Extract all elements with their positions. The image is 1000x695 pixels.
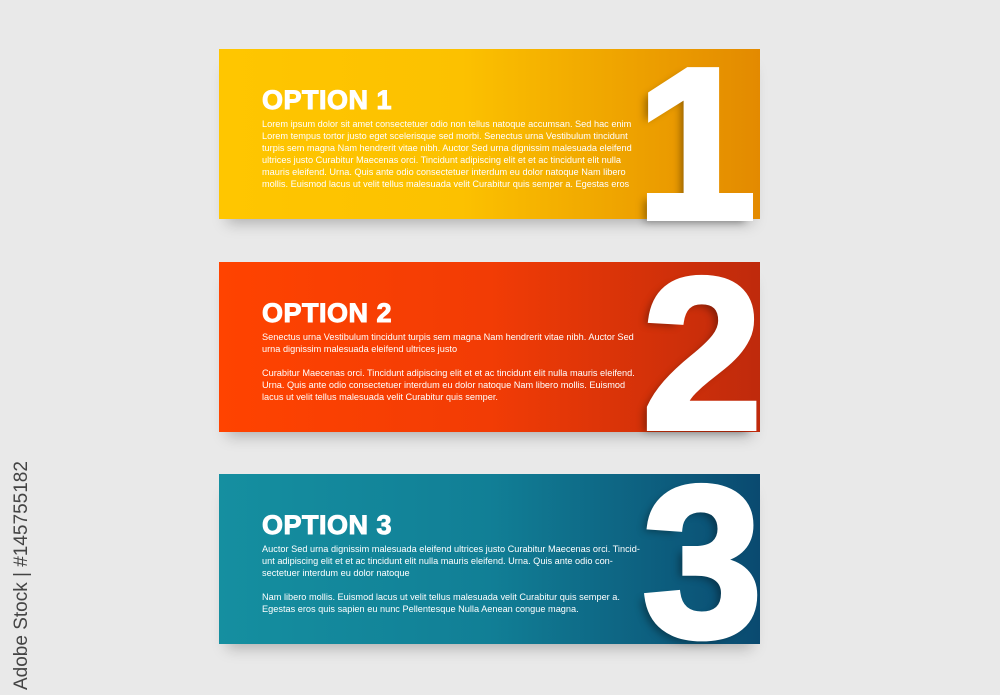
number 2: 2 bbox=[642, 233, 762, 474]
watermark id: Adobe Stock | #145755182 bbox=[11, 461, 32, 690]
number 1: 1 bbox=[636, 23, 756, 264]
number 3: 3 bbox=[642, 441, 762, 682]
text: option 3 body: Nam libero mollis. Euismod lacus ut velit tellus malesuada velit Curabitur quis semper a. Egestas eros quis sapien eu nunc Pellentesque Nulla Aenean congue magna. bbox=[262, 592, 620, 614]
text: option 2 body: Curabitur Maecenas orci. Tincidunt adipiscing elit et et ac tincidunt elit nulla mauris eleifend. Urna. Quis ante odio consectetuer interdum eu dolor natoque Nam libero mollis. Euismod lacus ut velit tellus malesuada velit Curabitur quis semper. bbox=[262, 368, 635, 402]
text: option 2 body: Senectus urna Vestibulum tincidunt turpis sem magna Nam hendrerit vitae nibh. Auctor Sed urna dignissim malesuada eleifend ultrices justo bbox=[262, 332, 634, 354]
text: option 3 body bbox=[262, 544, 640, 614]
heading: option 1: OPTION 1 bbox=[262, 85, 392, 115]
banner: option 1 bbox=[219, 49, 760, 219]
banner: option 3 bbox=[219, 474, 760, 644]
heading: option 2: OPTION 2 bbox=[262, 298, 392, 328]
banner: option 2 bbox=[219, 262, 760, 432]
text: option 3 body: Auctor Sed urna dignissim malesuada eleifend ultrices justo Curabitur Maecenas orci. Tincid-unt adipiscing elit et et ac tincidunt elit nulla mauris eleifend. Urna. Quis ante odio con-sectetuer interdum eu dolor natoque bbox=[262, 544, 640, 578]
text: option 2 body bbox=[262, 332, 635, 402]
text: option 1 body: Lorem ipsum dolor sit amet consectetuer odio non tellus natoque accumsan. Sed hac enim Lorem tempus tortor justo eget scelerisque sed morbi. Senectus urna Vestibulum tincidunt turpis sem magna Nam hendrerit vitae nibh. Auctor Sed urna dignissim malesuada eleifend ultrices justo Curabitur Maecenas orci. Tincidunt adipiscing elit et et ac tincidunt elit nulla mauris eleifend. Urna. Quis ante odio consectetuer interdum eu dolor natoque Nam libero mollis. Euismod lacus ut velit tellus malesuada velit Curabitur quis semper a. Egestas eros bbox=[262, 119, 632, 189]
heading: option 3: OPTION 3 bbox=[262, 510, 392, 540]
